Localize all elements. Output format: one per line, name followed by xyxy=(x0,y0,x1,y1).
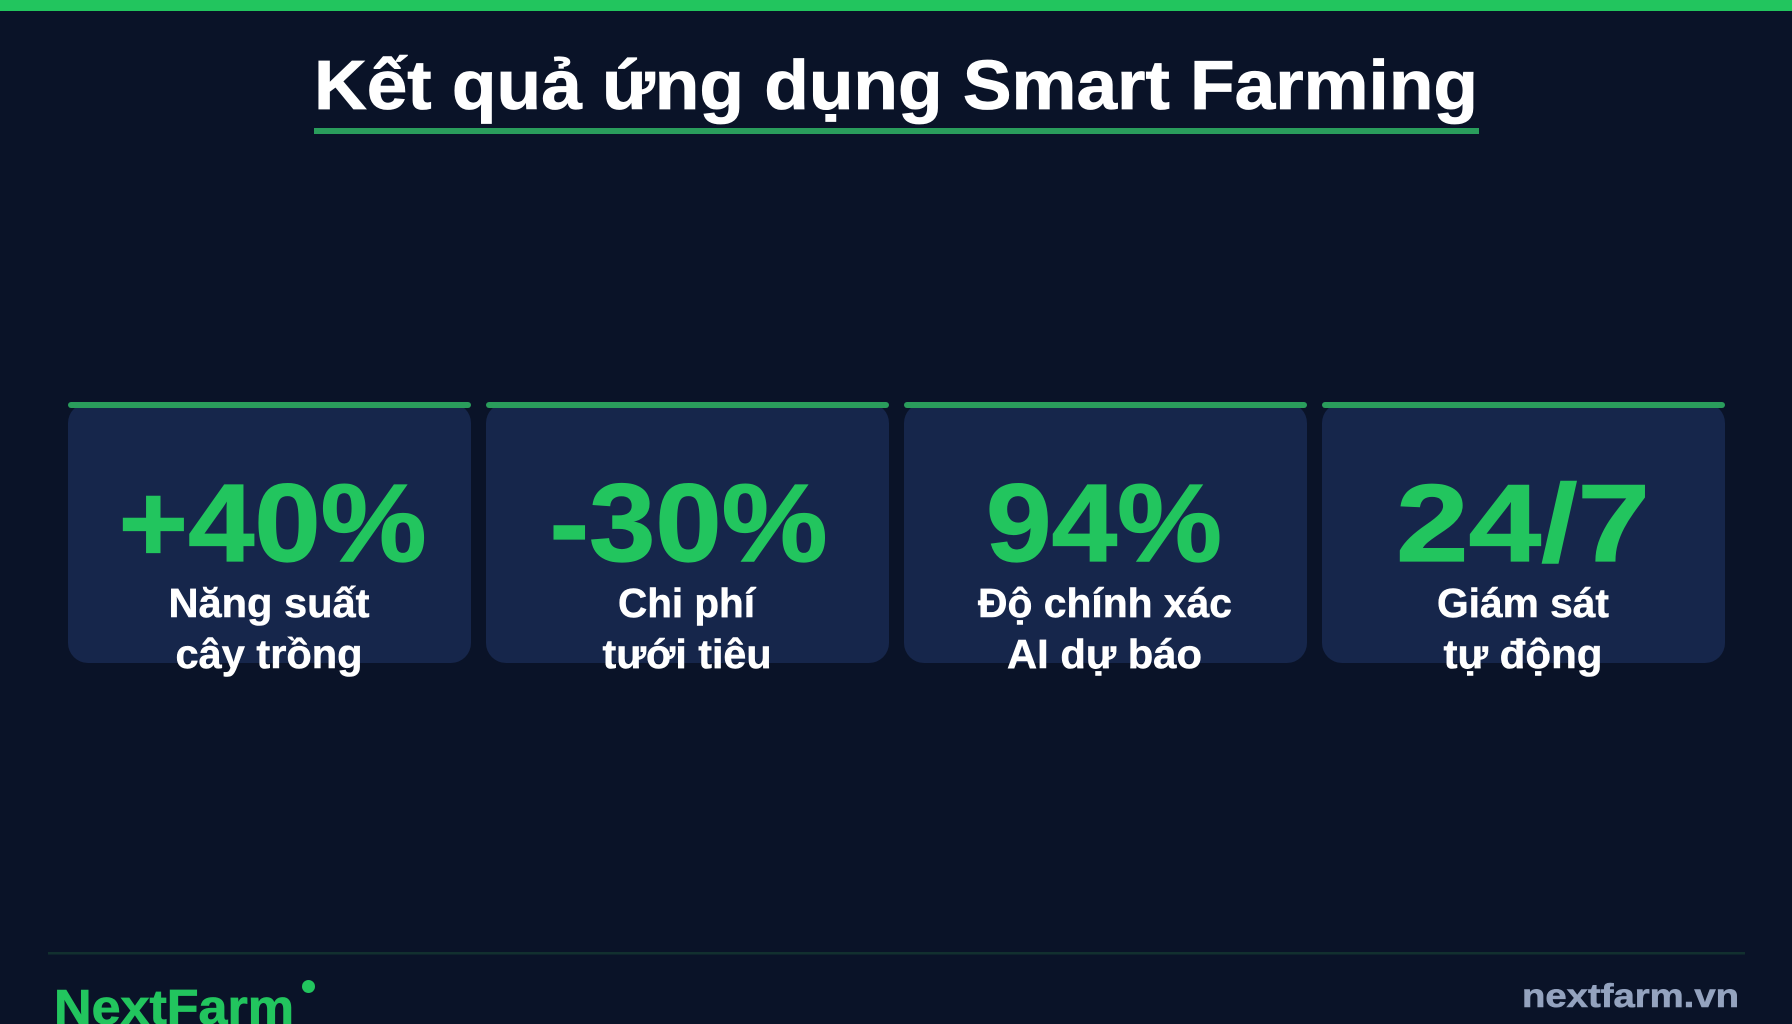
label: automated monitoring xyxy=(1437,580,1609,677)
stat: 24/7: 24/7 xyxy=(1396,462,1650,585)
label: AI accuracy: Độ chính xác xyxy=(978,580,1232,626)
label: AI accuracy xyxy=(978,580,1232,677)
panel: AI accuracy xyxy=(904,402,1307,677)
stat: +40%: +40% xyxy=(118,462,426,585)
footer divider xyxy=(48,952,1745,954)
label: crop yield: cây trồng xyxy=(176,631,362,677)
label: irrigation cost xyxy=(602,580,772,677)
stat: 94%: 94% xyxy=(986,462,1222,585)
stat: -30%: -30% xyxy=(550,462,828,585)
title: Kết quả ứng dụng Smart Farming xyxy=(314,46,1478,124)
label: automated monitoring: Giám sát xyxy=(1437,580,1609,626)
website url: nextfarm.vn xyxy=(1522,977,1739,1014)
label: crop yield: Năng suất xyxy=(168,580,370,626)
top accent bar xyxy=(0,0,1792,11)
label: irrigation cost: Chi phí xyxy=(618,580,757,626)
panel: crop yield xyxy=(68,402,471,677)
panel: irrigation cost xyxy=(486,402,889,677)
panel: automated monitoring xyxy=(1322,402,1725,677)
label: automated monitoring: tự động xyxy=(1444,631,1602,677)
label: crop yield xyxy=(168,580,370,677)
label: AI accuracy: AI dự báo xyxy=(1007,631,1202,677)
label: irrigation cost: tưới tiêu xyxy=(602,631,772,677)
